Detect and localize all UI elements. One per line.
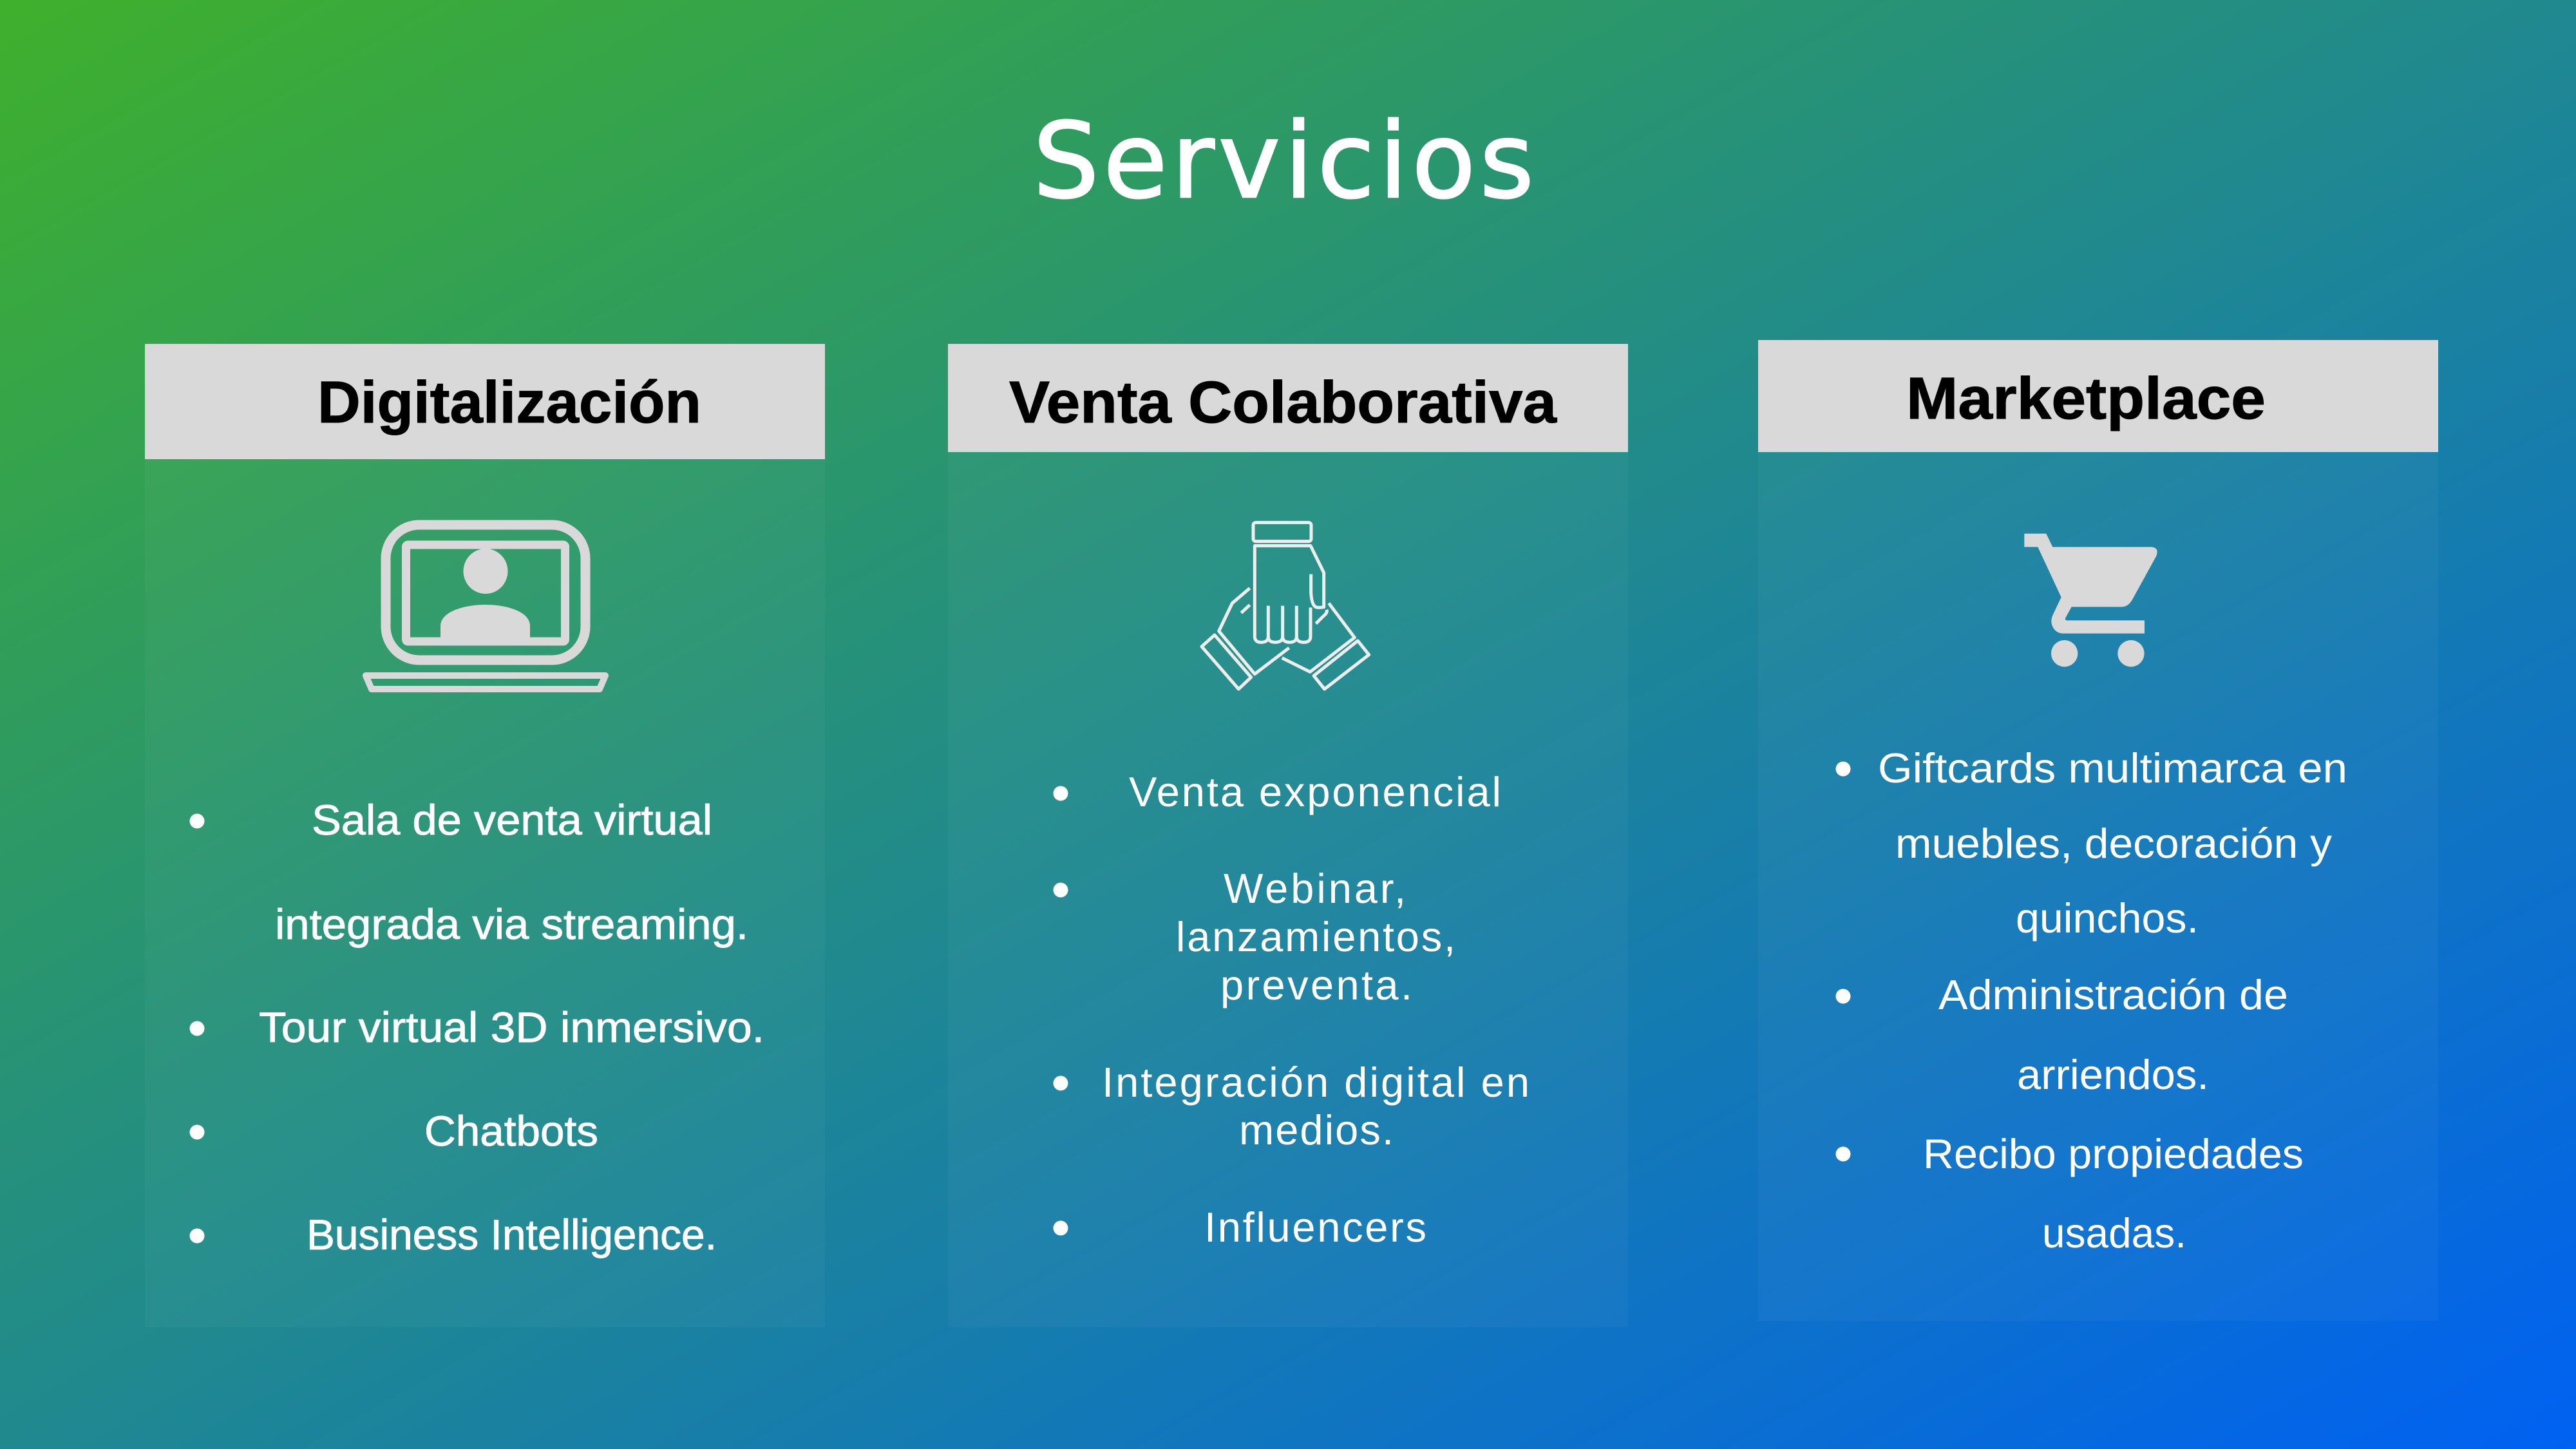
- heading bar: [948, 344, 1628, 452]
- list: Venta Colaborativa items: medios.: [1239, 1106, 1394, 1153]
- list: Digitalización items: Chatbots: [424, 1107, 598, 1155]
- list: Venta Colaborativa items: Venta exponencial: [1129, 768, 1501, 815]
- list: Venta Colaborativa items: preventa.: [1220, 961, 1412, 1009]
- list: Venta Colaborativa items: lanzamientos,: [1176, 913, 1455, 960]
- list: Venta Colaborativa items: [1054, 768, 1530, 1251]
- icon: shopping cart: [2024, 534, 2157, 667]
- panel: Digitalización: [145, 344, 825, 1327]
- list: Marketplace items: usadas.: [2042, 1209, 2186, 1256]
- list: Digitalización items: Sala de venta virtual: [312, 796, 712, 844]
- panel body: [948, 344, 1628, 1327]
- heading bar: Marketplace: [1906, 366, 2266, 431]
- list: Venta Colaborativa items: Integración digital en: [1102, 1059, 1530, 1106]
- heading bar: [145, 344, 825, 459]
- list: Marketplace items: [1835, 744, 2347, 1256]
- list: Marketplace items: muebles, decoración y: [1895, 820, 2333, 867]
- icon: stacked hands: [1202, 522, 1369, 689]
- icon: laptop with person: [366, 525, 605, 689]
- title: Servicios: [1033, 101, 1534, 222]
- list: Venta Colaborativa items: Influencers: [1204, 1204, 1426, 1251]
- heading bar: [1758, 340, 2438, 452]
- heading bar: Digitalización: [317, 370, 701, 435]
- list: Marketplace items: quinchos.: [2016, 895, 2199, 942]
- list: Digitalización items: Tour virtual 3D inmersivo.: [259, 1003, 764, 1051]
- panel body: [1758, 340, 2438, 1321]
- panel body: [145, 344, 825, 1327]
- panel: Marketplace: [1758, 340, 2438, 1321]
- list: Marketplace items: Administración de: [1938, 971, 2288, 1018]
- list: Digitalización items: integrada via streaming.: [275, 900, 748, 948]
- list: Digitalización items: [189, 796, 764, 1258]
- list: Marketplace items: Recibo propiedades: [1923, 1130, 2304, 1177]
- heading bar: Venta Colaborativa: [1009, 370, 1557, 435]
- list: Venta Colaborativa items: Webinar,: [1224, 865, 1406, 912]
- panel: Venta Colaborativa: [948, 344, 1628, 1327]
- list: Marketplace items: arriendos.: [2017, 1051, 2209, 1098]
- list: Digitalización items: Business Intelligence.: [307, 1211, 717, 1258]
- list: Marketplace items: Giftcards multimarca en: [1878, 744, 2347, 791]
